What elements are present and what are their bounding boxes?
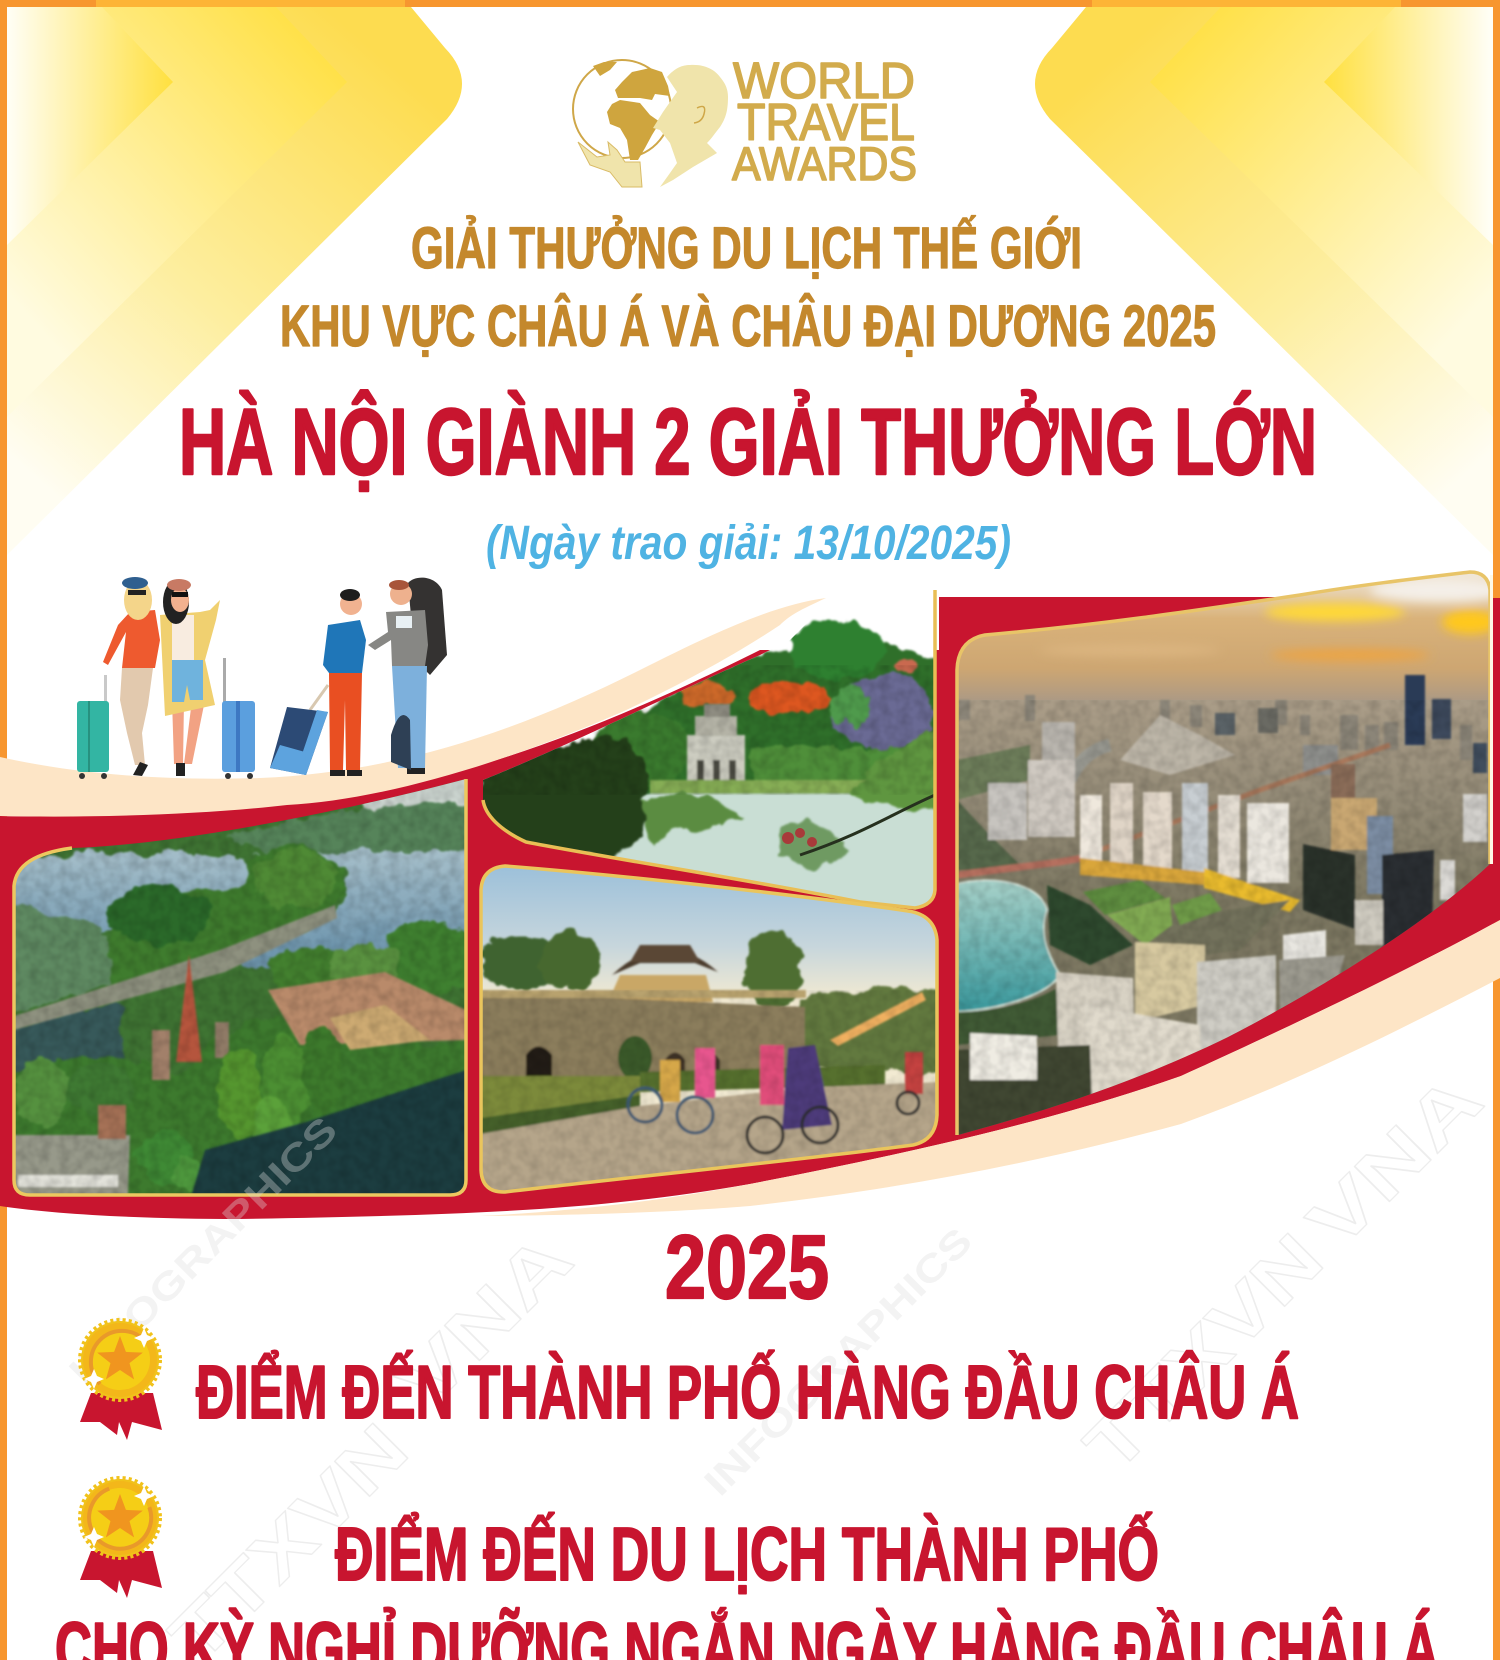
watermarks: VNA [1293,1059,1498,1264]
award 2 text [55,1512,1439,1660]
photo C frame [481,866,937,1192]
lake [614,792,934,906]
logo globe [573,60,671,158]
pagoda [176,955,202,1062]
red blossoms [782,828,817,847]
photo texture [480,990,940,1200]
navy suitcase [270,685,328,775]
apartment towers [1042,722,1075,762]
photo D frame [957,572,1490,1135]
football fields [1083,880,1165,915]
lower water [190,1070,466,1200]
logo: World Travel Awards [573,52,917,190]
cyclists [628,1045,923,1153]
man in blue shirt [323,589,366,776]
small backpack [391,715,411,770]
logo head [653,65,728,187]
award 2 text: ĐIỂM ĐẾN DU LỊCH THÀNH PHỐ [335,1512,1159,1596]
photo: do thi Ha Noi [950,565,1500,1160]
dark glass towers [1303,844,1355,929]
photo: Chua Tran Quoc [5,770,480,1200]
lower foliage [748,744,905,780]
red collage backing [0,597,1500,1219]
medal 2 [78,1479,162,1598]
white strip beside photo D [1490,575,1493,864]
man in grey shirt [368,580,428,774]
logo ear [694,106,705,123]
sun streak [830,992,926,1046]
left green [957,745,1030,800]
watermarks: TTXVN [1070,1219,1338,1487]
right chevrons [1035,7,1493,555]
logo wordmark: TRAVEL [737,94,915,152]
infographics watermark left: INFOGRAPHICS [62,1109,346,1393]
dark towers [1405,675,1425,745]
pond bank trees [956,985,1062,1045]
photo texture [950,700,1495,1150]
far shore [226,800,464,856]
logo continents [593,62,670,160]
conifers [218,1049,262,1141]
photo A frame [14,779,466,1195]
freeway [957,855,1100,875]
park trees [1047,885,1133,965]
purple tree [833,676,937,748]
year heading: 2025 [665,1218,829,1318]
paved path [481,1082,937,1200]
ground [14,1135,130,1195]
lakes [5,853,250,935]
blue suitcase [222,658,255,779]
city sky [950,565,1495,700]
roofs [268,972,466,1045]
turtle tower [687,704,745,781]
left chevrons [7,7,462,555]
watermarks [155,1059,1498,1660]
background foliage [644,640,934,796]
logo wordmark [732,52,917,190]
left bank [5,905,110,1015]
infographics watermark centre: INFOGRAPHICS [697,1220,981,1504]
photo: Ho Guom and Thap Rua [483,618,934,906]
orange right edge above red [1493,560,1500,598]
golden lights [1080,858,1205,885]
grass bank [648,778,866,796]
photo texture [10,775,470,1200]
teal suitcase [77,675,109,779]
foreground tree [478,735,650,855]
logo wordmark: WORLD [733,52,915,109]
woman in red [103,577,160,776]
near low buildings [956,1045,1092,1140]
photo B frame [483,590,935,908]
citadel trees [480,934,560,990]
sky [361,780,464,814]
gardens [481,1076,640,1122]
shore road [14,905,337,1030]
logo wordmark: AWARDS [732,137,917,190]
logo hand [578,142,642,187]
island trees [16,1055,128,1079]
tower [608,975,713,1002]
top bar tint [96,0,1401,7]
left water [16,1002,126,1073]
watermarks: VNA [383,1218,588,1423]
near apartments [1135,942,1205,1022]
haze smoke [1120,715,1235,775]
pond [956,880,1060,1012]
citadel wall [481,992,805,1078]
award date: (Ngày trao giải: 13/10/2025) [486,517,1011,570]
woman in yellow [160,579,220,776]
cream swoosh top [0,598,826,817]
heading: award name [280,216,1216,359]
peninsula trees [105,845,343,985]
far skyline [958,695,1472,760]
flame tree [748,682,832,712]
photo: Hoang thanh Thang Long [480,860,945,1200]
right trees [266,944,338,988]
travellers illustration [77,577,447,779]
medal 1 [80,1321,162,1440]
cream swoosh bottom [480,920,1500,1216]
backpack [408,578,447,675]
heading: award name: GIẢI THƯỞNG DU LỊCH THẾ GIỚI [411,216,1082,281]
photo texture [480,665,940,795]
